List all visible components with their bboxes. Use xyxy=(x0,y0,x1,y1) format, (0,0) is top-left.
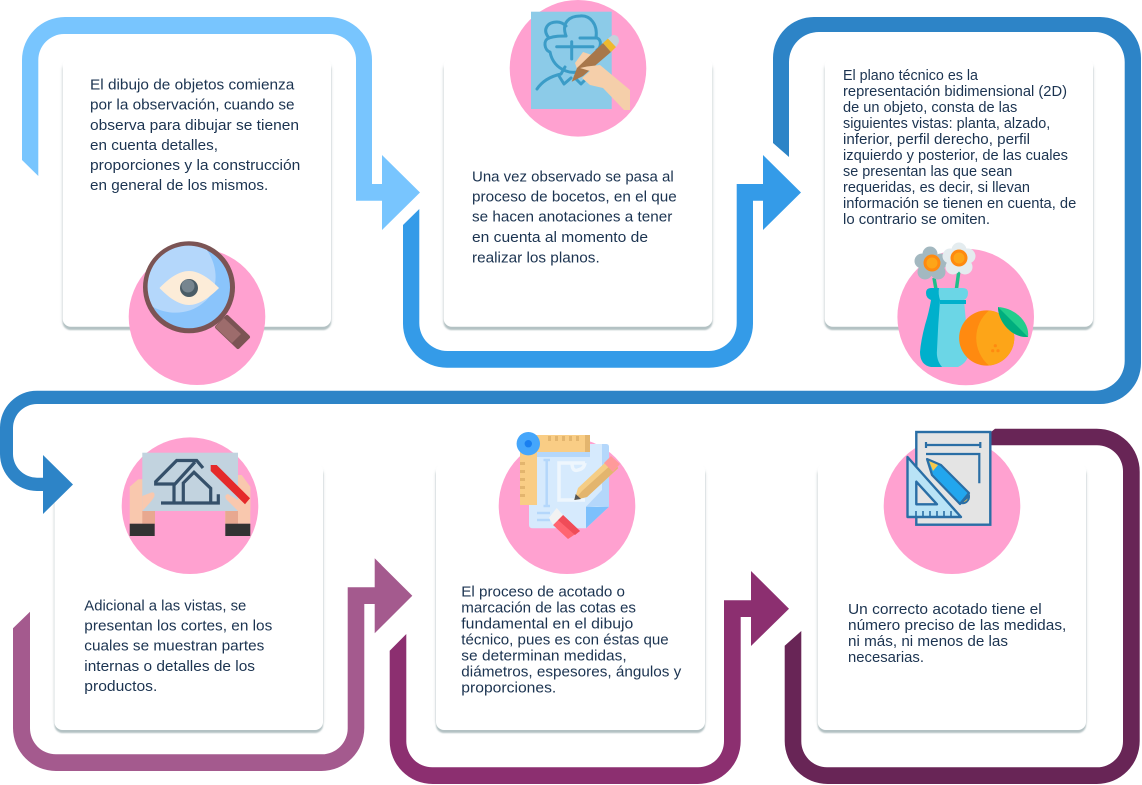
card background xyxy=(436,463,705,733)
text block: step 3: representación bidimensional (2D) xyxy=(843,83,1067,100)
card background xyxy=(54,463,323,733)
text block: step 1: proporciones y la construcción xyxy=(90,157,300,174)
text block: step 3: información se tienen en cuenta, de xyxy=(843,195,1076,212)
text block: step 5: proporciones. xyxy=(461,679,556,696)
panel: step 2 sketches xyxy=(444,0,712,330)
text block: step 5 xyxy=(461,583,682,696)
panel: step 3 technical drawing xyxy=(825,58,1093,385)
text block: step 2 xyxy=(472,168,677,266)
arrow 1: light blue connector xyxy=(22,17,420,230)
card background xyxy=(444,58,712,330)
text block: step 4: cuales se muestran partes xyxy=(84,637,264,654)
text block: step 6: ni más, ni menos de las xyxy=(848,633,1008,650)
arrow 5: purple connector xyxy=(390,571,789,784)
text block: step 3: se presentan las que sean xyxy=(843,163,1012,180)
text block: step 2: se hacen anotaciones a tener xyxy=(472,208,672,225)
arrow 2: medium blue connector xyxy=(403,155,801,368)
arrow 3: dark blue connector xyxy=(0,17,1141,514)
text block: step 1: en cuenta detalles, xyxy=(90,137,218,154)
text block: step 3: inferior, perfil derecho, perfil xyxy=(843,131,1030,148)
panel: step 5 dimensioning xyxy=(436,432,705,733)
arrow 4: mauve connector xyxy=(13,558,412,771)
text block: step 3: lo contrario se omiten. xyxy=(843,211,990,228)
arrow 6: dark plum connector xyxy=(785,429,1140,784)
text block: step 3: de un objeto, consta de las xyxy=(843,99,1017,116)
text block: step 6: número preciso de las medidas, xyxy=(848,617,1066,634)
text block: step 4 xyxy=(84,597,272,695)
text block: step 1: observa para dibujar se tienen xyxy=(90,117,299,134)
panel: step 4 cuts xyxy=(54,437,323,733)
text block: step 6: necesarias. xyxy=(848,649,924,666)
text block: step 3: siguientes vistas: planta, alzado, xyxy=(843,115,1050,132)
card background xyxy=(818,463,1086,733)
icon: vase with flowers and orange xyxy=(897,242,1034,385)
icon: hand sketching a face xyxy=(510,0,646,137)
text block: step 1 xyxy=(90,76,300,194)
text block: step 5: se determinan medidas, xyxy=(461,647,627,664)
text block: step 1: El dibujo de objetos comienza xyxy=(90,76,295,93)
card background xyxy=(63,58,331,330)
text block: step 4: presentan los cortes, en los xyxy=(84,617,272,634)
text block: step 5: El proceso de acotado o xyxy=(461,583,625,600)
text block: step 5: marcación de las cotas es xyxy=(461,599,636,616)
text block: step 2: Una vez observado se pasa al xyxy=(472,168,674,185)
text block: step 5: técnico, pues es con éstas que xyxy=(461,631,669,648)
text block: step 3 xyxy=(843,67,1076,228)
text block: step 6: Un correcto acotado tiene el xyxy=(848,601,1042,618)
text block: step 2: realizar los planos. xyxy=(472,249,600,266)
card background xyxy=(825,58,1093,330)
icon: plan with ruler, pencil and eraser xyxy=(499,432,635,574)
text block: step 4: internas o detalles de los xyxy=(84,658,255,675)
panel: step 1 observation xyxy=(63,58,331,385)
text block: step 3: El plano técnico es la xyxy=(843,67,979,84)
text block: step 2: en cuenta al momento de xyxy=(472,229,648,246)
panel: step 6 correct dimensioning xyxy=(818,432,1086,733)
text block: step 1: en general de los mismos. xyxy=(90,177,268,194)
icon: drawing sheet with set square and pencil xyxy=(884,432,1020,574)
text block: step 5: fundamental en el dibujo xyxy=(461,615,633,632)
icon: magnifying glass with eye xyxy=(129,244,265,385)
icon: hands holding house plan xyxy=(122,437,258,574)
text block: step 3: requeridas, es decir, si llevan xyxy=(843,179,1030,196)
text block: step 5: diámetros, espesores, ángulos y xyxy=(461,663,682,680)
text block: step 1: por la observación, cuando se xyxy=(90,96,295,113)
text block: step 2: proceso de bocetos, en el que xyxy=(472,188,677,205)
text block: step 4: productos. xyxy=(84,678,157,695)
text block: step 4: Adicional a las vistas, se xyxy=(84,597,246,614)
text block: step 6 xyxy=(848,601,1066,666)
text block: step 3: izquierdo y posterior, de las cuales xyxy=(843,147,1068,164)
